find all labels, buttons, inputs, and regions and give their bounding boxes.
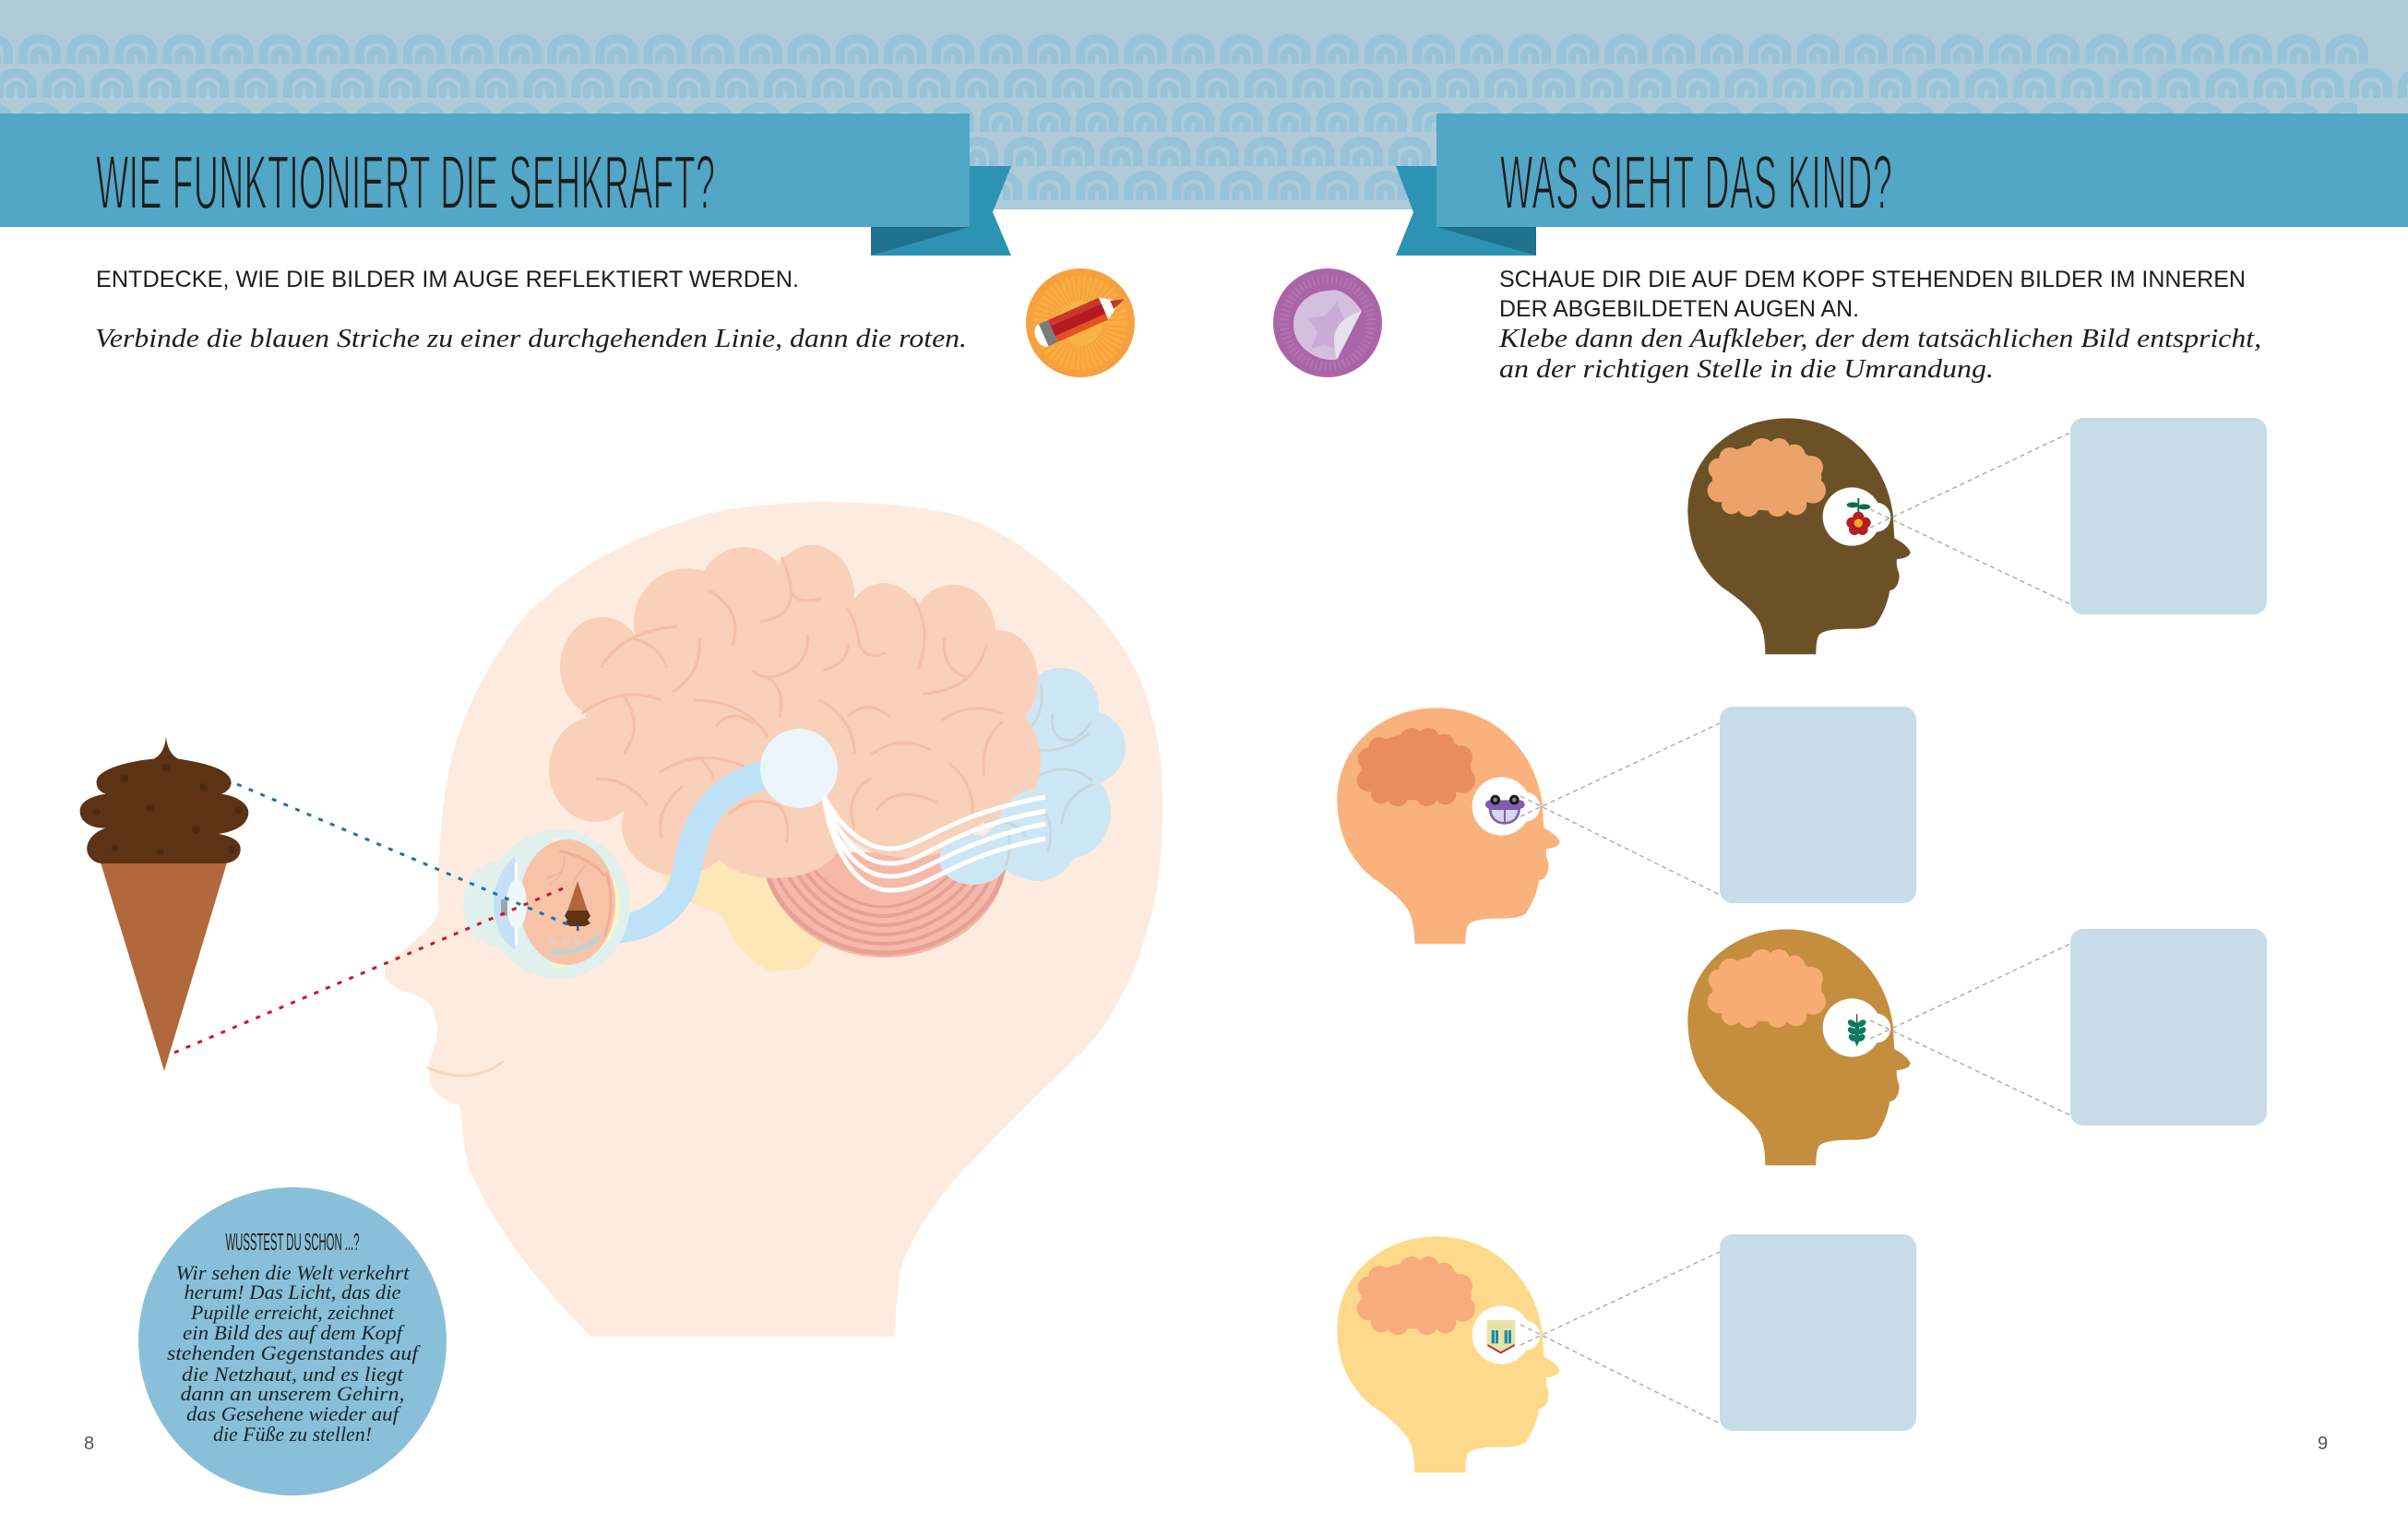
child head 1: brown with flower: [1687, 418, 2070, 654]
plant image: [1846, 1014, 1867, 1047]
red sight line: [174, 887, 567, 1053]
callout: did you know: Wir sehen die Welt verkehrt: [175, 1261, 410, 1284]
blue sight line: [237, 784, 567, 924]
callout: did you know: herum! Das Licht, das die: [185, 1280, 401, 1304]
brain folds: [582, 557, 1003, 842]
frog image: [1485, 795, 1525, 823]
brain stem: [660, 859, 827, 972]
child head 4: yellow with house: [1337, 1236, 1720, 1472]
brain: [549, 545, 1041, 878]
optic nerve: [613, 775, 763, 929]
page number 8: 8: [84, 1434, 94, 1454]
child head 3: ochre with plant: [1687, 929, 2070, 1165]
instructions: left: ENTDECKE, WIE DIE BILDER IM AUGE REFLEKTIERT WERDEN.: [96, 267, 799, 292]
instructions: right: [1498, 267, 2261, 384]
callout: did you know: Pupille erreicht, zeichnet: [190, 1301, 395, 1324]
visual fibres: [824, 796, 1045, 890]
callout: did you know: [138, 1187, 447, 1495]
ice cream cone: [80, 736, 248, 1071]
sticker frame 4: [1720, 1234, 1916, 1431]
inverted ice cream on retina: [567, 881, 588, 911]
title: left: WIE FUNKTIONIERT DIE SEHKRAFT?: [96, 139, 715, 225]
cerebellum: [760, 852, 1007, 958]
occipital lobe: lower: [939, 684, 1092, 885]
occipital lobe: upper: [1015, 668, 1126, 859]
instructions: right: DER ABGEBILDETEN AUGEN AN.: [1499, 296, 1859, 322]
page number 9: 9: [2318, 1434, 2328, 1454]
sticker frame 3: [2070, 929, 2267, 1125]
icon: sticker badge: [1273, 268, 1382, 377]
callout: did you know: dann an unserem Gehirn,: [181, 1382, 404, 1405]
eye cross-section: [463, 829, 630, 979]
callout: did you know: stehenden Gegenstandes auf: [167, 1341, 421, 1364]
callout: did you know: die Füße zu stellen!: [213, 1423, 372, 1446]
retinal veins: [546, 856, 587, 886]
sticker frame 1: [2070, 418, 2267, 614]
right ribbon banner: [1396, 113, 2408, 256]
callout: did you know: das Gesehene wieder auf: [186, 1402, 401, 1425]
instructions: right: Klebe dann den Aufkleber, der dem tatsächlichen Bild entspricht,: [1498, 325, 2261, 353]
instructions: left: [95, 267, 967, 353]
title: right: WAS SIEHT DAS KIND?: [1500, 139, 1892, 225]
header pattern band: [0, 0, 2408, 209]
main head profile: [385, 502, 1162, 1337]
house image: [1487, 1320, 1515, 1352]
flower image: [1846, 498, 1871, 535]
callout: did you know: die Netzhaut, und es liegt: [182, 1363, 404, 1386]
optic chiasm: [760, 729, 838, 808]
callout: did you know: WUSSTEST DU SCHON ...?: [225, 1228, 360, 1256]
instructions: left: Verbinde die blauen Striche zu einer durchgehenden Linie, dann die roten.: [95, 325, 967, 353]
child head 2: peach with frog: [1337, 708, 1720, 944]
sticker frame 2: [1720, 707, 1916, 903]
left ribbon banner: [0, 113, 1011, 256]
instructions: right: an der richtigen Stelle in die Umrandung.: [1499, 355, 1994, 384]
instructions: right: SCHAUE DIR DIE AUF DEM KOPF STEHENDEN BILDER IM INNEREN: [1499, 267, 2246, 292]
callout: did you know: ein Bild des auf dem Kopf: [183, 1321, 405, 1344]
icon: pencil badge: [1026, 268, 1135, 377]
mouth line: [427, 1061, 504, 1076]
